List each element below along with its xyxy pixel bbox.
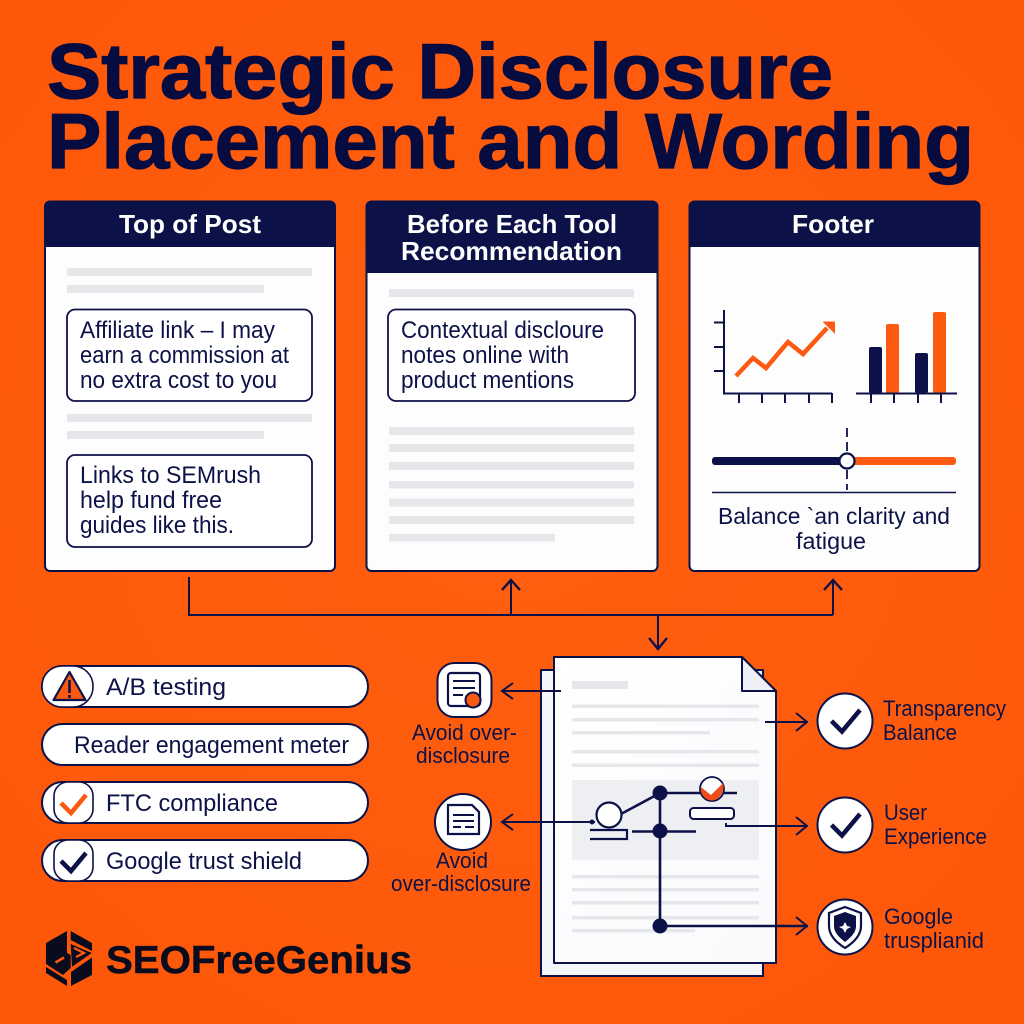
- title: Strategic Disclosure: [47, 27, 833, 115]
- title: [47, 27, 974, 185]
- pill: reader engagement meter: [42, 724, 368, 765]
- callout: contextual notes: Contextual discloure: [401, 317, 604, 344]
- item: google trust: Google: [884, 904, 953, 929]
- document back page: [541, 670, 763, 976]
- icon: navy check: [54, 840, 93, 881]
- pill: google trust shield: Google trust shield: [106, 848, 302, 875]
- callout: semrush links: guides like this.: [80, 512, 234, 539]
- icon: shield circle: [818, 900, 872, 954]
- document front page: [554, 657, 808, 963]
- connector arrows between panels and document: [189, 577, 842, 649]
- heading: footer: [690, 202, 980, 247]
- item: user experience: [818, 798, 987, 852]
- text placeholder lines: [67, 268, 312, 439]
- callout: contextual notes: product mentions: [401, 367, 574, 394]
- flow diagram inside document: [590, 777, 808, 934]
- balance slider: [712, 428, 956, 492]
- item: user experience: User: [884, 800, 927, 825]
- item: avoid over-disclosure one: disclosure: [416, 743, 510, 768]
- bar chart: [856, 312, 957, 403]
- heading: footer: Footer: [792, 209, 874, 239]
- callout: semrush links: [67, 455, 312, 547]
- item: google trust: [818, 900, 984, 954]
- item: avoid over-disclosure two: Avoid: [436, 848, 488, 873]
- callout: affiliate link: earn a commission at: [80, 342, 289, 369]
- panel: footer: [690, 202, 980, 571]
- icon: document circle: [435, 794, 491, 850]
- arrow: to left icon one: [502, 683, 561, 699]
- logo: SEOFreeGenius: [46, 931, 412, 986]
- logo: SEOFreeGenius: SEOFreeGenius: [106, 939, 412, 982]
- arrow: to transparency balance: [765, 713, 807, 731]
- heading: top of post: [45, 202, 335, 247]
- caption: balance: fatigue: [796, 528, 866, 554]
- callout: affiliate link: no extra cost to you: [80, 367, 277, 394]
- item: avoid over-disclosure two: over-disclosure: [391, 871, 531, 896]
- pill: reader engagement meter: Reader engagement meter: [74, 732, 349, 759]
- pill: google trust shield: [42, 840, 368, 881]
- callout: affiliate link: Affiliate link – I may: [80, 317, 275, 344]
- item: transparency balance: Transparency: [883, 696, 1006, 721]
- item: avoid over-disclosure one: [412, 663, 517, 768]
- callout: affiliate link: [67, 310, 312, 401]
- heading: before each tool recommendation: Recommendation: [401, 236, 622, 266]
- pill: ftc compliance: FTC compliance: [106, 790, 278, 817]
- caption: balance: Balance `an clarity and: [718, 503, 950, 529]
- item: google trust: trusplianid: [884, 928, 984, 953]
- panel: top of post: [45, 202, 335, 571]
- callout: contextual notes: notes online with: [401, 342, 569, 369]
- arrow: to google trust: [796, 917, 807, 935]
- heading: before each tool recommendation: [366, 202, 658, 273]
- icon: check circle: [818, 694, 872, 748]
- callout: semrush links: help fund free: [80, 487, 222, 514]
- document text lines: [572, 681, 759, 932]
- icon: document with orange dot: [438, 663, 492, 717]
- pill: a/b testing: [42, 666, 368, 707]
- panel: before each tool recommendation: [366, 202, 658, 571]
- item: avoid over-disclosure two: [391, 794, 531, 896]
- text placeholder lines: [389, 289, 634, 542]
- callout: semrush links: Links to SEMrush: [80, 462, 261, 489]
- line chart: [714, 310, 835, 403]
- title: Placement and Wording: [47, 97, 974, 185]
- pill: a/b testing: A/B testing: [106, 674, 226, 701]
- pill: ftc compliance: [42, 782, 368, 823]
- heading: top of post: Top of Post: [119, 209, 261, 239]
- item: transparency balance: Balance: [883, 720, 957, 745]
- arrow: to user experience: [726, 817, 807, 835]
- icon: orange check: [54, 782, 93, 823]
- item: user experience: Experience: [884, 824, 987, 849]
- item: avoid over-disclosure one: Avoid over-: [412, 720, 517, 745]
- icon: isometric cube: [46, 931, 92, 986]
- arrow: to left icon two: [502, 814, 595, 830]
- callout: contextual notes: [388, 310, 635, 401]
- icon: warning: [42, 666, 93, 707]
- heading: before each tool recommendation: Before Each Tool: [407, 209, 617, 239]
- icon: check circle: [818, 798, 872, 852]
- item: transparency balance: [818, 694, 1006, 748]
- caption: balance: [718, 503, 950, 554]
